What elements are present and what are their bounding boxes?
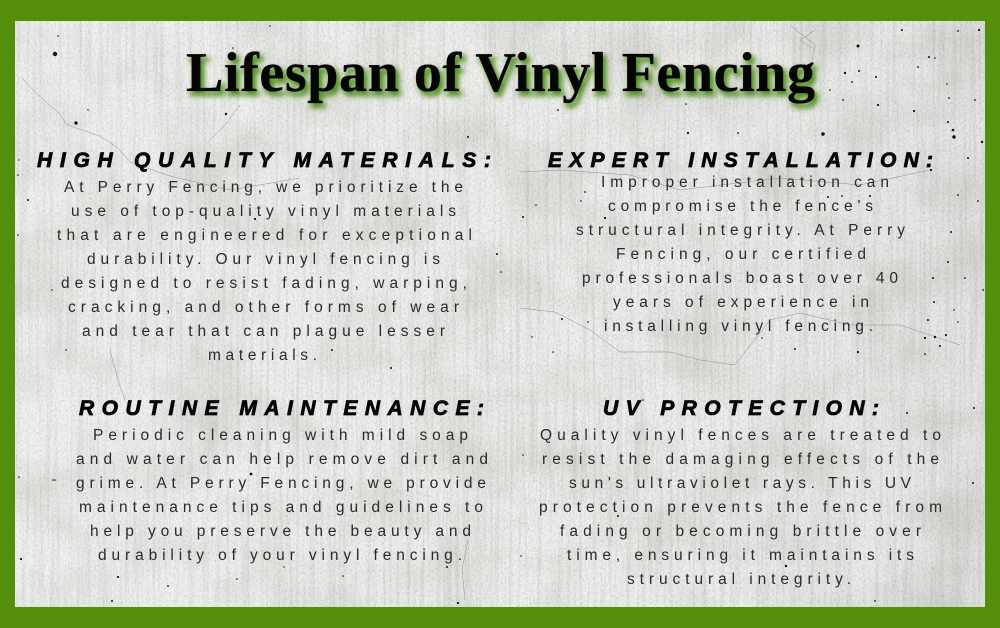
text block: high quality materials: designed to resist fading, warping,	[61, 275, 467, 292]
text block: expert installation: professionals boast over 40	[582, 270, 898, 287]
text block: routine maintenance: maintenance tips and guidelines to	[79, 499, 483, 516]
heading: expert installation: EXPERT INSTALLATION:	[548, 149, 933, 172]
text block: expert installation	[576, 174, 905, 335]
heading: routine maintenance: ROUTINE MAINTENANCE:	[79, 397, 484, 420]
title: Lifespan of Vinyl Fencing	[186, 42, 815, 104]
panel: routine maintenance	[76, 397, 488, 564]
text block: high quality materials: use of top-quality vinyl materials	[71, 203, 456, 220]
text block: high quality materials: materials.	[208, 347, 317, 364]
text block: uv protection: sun's ultraviolet rays. This UV	[569, 475, 912, 492]
text block: high quality materials: cracking, and other forms of wear	[68, 299, 459, 316]
text block: routine maintenance	[76, 427, 488, 564]
text block: high quality materials	[57, 179, 472, 364]
text block: routine maintenance: grime. At Perry Fencing, we provide	[76, 475, 486, 492]
text block: uv protection	[539, 427, 942, 588]
text block: high quality materials: At Perry Fencing, we prioritize the	[64, 179, 463, 196]
text block: expert installation: structural integrity. At Perry	[576, 222, 905, 239]
text block: expert installation: years of experience in	[613, 294, 869, 311]
text block: routine maintenance: and water can help remove dirt and	[76, 451, 488, 468]
text block: high quality materials: durability. Our vinyl fencing is	[87, 251, 440, 268]
panel: uv protection	[539, 397, 942, 588]
text block: uv protection: structural integrity.	[627, 571, 851, 588]
title: Lifespan of Vinyl Fencing	[189, 46, 818, 108]
text block: expert installation: compromise the fence's	[608, 198, 873, 215]
text block: uv protection: protection prevents the fence from	[539, 499, 942, 516]
text block: uv protection: Quality vinyl fences are treated to	[540, 427, 941, 444]
text block: expert installation: Fencing, our certified	[616, 246, 866, 263]
panel: high quality materials	[37, 149, 491, 364]
text block: routine maintenance: Periodic cleaning with mild soap	[93, 427, 468, 444]
text block: routine maintenance: durability of your vinyl fencing.	[98, 547, 462, 564]
text block: expert installation: Improper installation can	[601, 174, 889, 191]
text block: uv protection: time, ensuring it maintains its	[567, 547, 914, 564]
heading: high quality materials: HIGH QUALITY MATERIALS:	[37, 149, 491, 172]
text block: uv protection: fading or becoming brittle over	[560, 523, 921, 540]
text block: high quality materials: that are engineered for exceptional	[57, 227, 472, 244]
text block: uv protection: resist the damaging effects of the	[542, 451, 939, 468]
text block: expert installation: installing vinyl fencing.	[604, 318, 873, 335]
text block: high quality materials: and tear that can plague lesser	[82, 323, 445, 340]
heading: uv protection: UV PROTECTION:	[603, 397, 879, 420]
text block: routine maintenance: help you preserve the beauty and	[90, 523, 471, 540]
panel: expert installation	[548, 149, 933, 335]
